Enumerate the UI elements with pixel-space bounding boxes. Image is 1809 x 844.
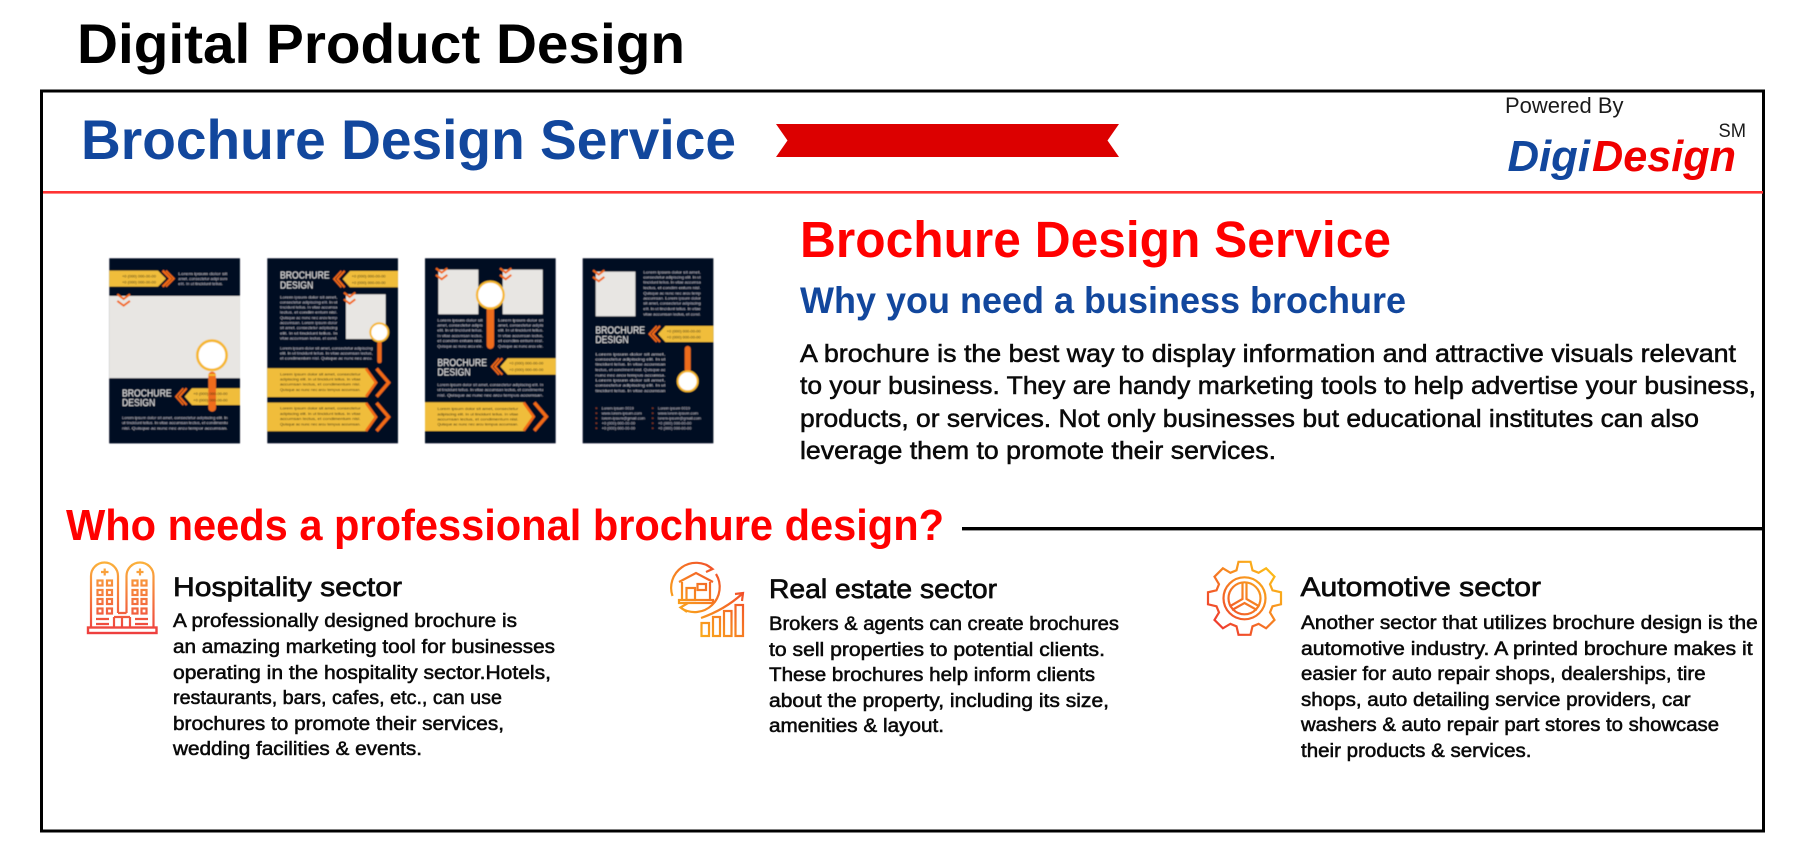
text block: intro paragraph: leverage them to promote their services. (800, 437, 1276, 465)
text block: hospitality description: operating in the hospitality sector.Hotels, (173, 662, 551, 684)
brochure 3: nisl. Quisque ac nunc nec arcu tempus accumsan. (437, 393, 543, 397)
heading: real estate sector: Real estate sector (769, 574, 997, 604)
brochure 3: accumsan lectus, et condimentum nisl. (437, 417, 518, 421)
brochure 4: » (595, 411, 597, 415)
brochure 3: +0 (000) 000-00-00 (509, 362, 543, 366)
brochure 2: accumsan lectus, et condimentum nisl. (280, 417, 361, 421)
brochure 4: Lorem ipsum dolor sit amet, (643, 270, 701, 274)
text block: automotive description: washers & auto repair part stores to showcase (1300, 714, 1719, 736)
brochure 2: sit amet, consectetur adipiscing (280, 326, 337, 330)
brochure 4: Lorem ipsum 0019 (658, 406, 690, 410)
text block: intro paragraph: products, or services. Not only businesses but educational institutes can also (800, 405, 1699, 433)
brochure 2: elit. In ut tincidunt tellus. In (280, 331, 337, 335)
brochure 4: lectus, et condiment nisl. Quisque ac (595, 368, 666, 372)
brochure 1: +0 (000) 000-00-00 (122, 281, 156, 285)
brochure 4: » (652, 411, 654, 415)
text block: hospitality description: an amazing marketing tool for businesses (173, 636, 555, 658)
brochure 4: accumsan. Lorem ipsum dolor (643, 296, 702, 300)
brochure 1: elit. In ut tincidunt tellus. (178, 282, 223, 286)
logo: powered by: Powered By (1505, 93, 1624, 118)
brochure 4: DESIGN (595, 335, 629, 346)
brochure 4: vitae accumsan lectus, et cond. (643, 312, 701, 316)
brochure 1: +0 (000) 000-00-00 (193, 392, 228, 396)
brochure 4: » (595, 426, 597, 430)
brochure 3: Quisque ac nunc nec arcu tempus accumsan. (437, 423, 518, 427)
panel: hospitality sector (88, 562, 555, 760)
header: service title: Brochure Design Service (81, 108, 736, 171)
brochure 2: elit. In ut tincidunt tellus. In vitae accumsan lectus, (280, 352, 373, 356)
brochure 4: » (652, 426, 654, 430)
brochure 2: Quisque ac nunc nec arcu temp (280, 316, 337, 320)
brochure 2: adipiscing elit. In ut tincidunt tellus. In vitae (280, 378, 361, 382)
header: red ribbon (776, 124, 1119, 157)
brochure 3: In vitae accumsan lectus, (498, 334, 543, 338)
brochure 2: consectetur adipiscing elit. In ut (280, 300, 337, 304)
brochure 3: amet, consectetur adipis (437, 324, 483, 328)
section rule (962, 527, 1764, 530)
brochure 3: DESIGN (437, 368, 471, 379)
brochure 4: +0 (000) 000-00-00 (602, 426, 635, 430)
text block: automotive description (1300, 612, 1758, 762)
brochure 4: consectetur adipiscing elit. In ut (595, 358, 665, 362)
heading: brochure design service: Brochure Design Service (800, 211, 1391, 268)
text block: automotive description: automotive industry. A printed brochure makes it (1301, 638, 1753, 660)
brochure 4: elit. In ut tincidunt tellus. In vitae (643, 307, 701, 311)
brochure 3: BROCHURE (437, 358, 487, 369)
brochure 4: sit amet, consectetur adipiscing (643, 302, 701, 306)
brochure 1: ut tincidunt tellus. In vitae accumsan lectus, et condimentu (122, 421, 228, 425)
brochure 3: Quisque ac nunc arcu ele. (498, 344, 543, 348)
brochure 1: nisl. Quisque ac nunc nec arcu tempor accumsan. (122, 426, 228, 430)
logo: wordmark (1508, 132, 1736, 181)
brochure 2: vitae accumsan lectus, et cond. (280, 336, 337, 340)
heading: automotive sector: Automotive sector (1300, 572, 1541, 602)
text block: real estate description: Brokers & agents can create brochures (769, 613, 1119, 635)
brochure 4: Lorem ipsum 0019 (602, 406, 634, 410)
brochure 2: Lorem ipsum dolor sit amet, consectetur adipiscing (280, 346, 373, 350)
brochure 4: +0 (000) 000-00-00 (658, 426, 691, 430)
text block: hospitality description: wedding facilities & events. (172, 738, 422, 760)
brochure 3: elit. In ut tincidunt tellus. (498, 329, 543, 333)
brochure 4: Lorem ipsum dolor sit amet, (595, 378, 665, 382)
brochure 3: +0 (000) 000-00-00 (509, 368, 543, 372)
brochure 1 (109, 258, 240, 443)
brochure 4: consectetur adipiscing elit. In ut (595, 384, 665, 388)
title: Digital Product Design (77, 12, 685, 75)
brochure 1: amet, consectetur adipi sum (178, 277, 227, 281)
brochure 4: www.lorem-ipsum.com (658, 411, 698, 415)
brochure 4: » (652, 406, 654, 410)
brochure 3: Quisque ac nunc arcu ele. (437, 344, 483, 348)
text block: intro paragraph (800, 340, 1756, 465)
text block: hospitality description: A professionally designed brochure is (173, 610, 517, 632)
brochure 2: +0 (000) 000-00-00 (352, 281, 386, 285)
brochure 4: BROCHURE (595, 325, 646, 336)
brochure 1: +0 (000) 000-00-00 (122, 274, 156, 278)
brochure 4: lorem-ipsum@gmail.com (658, 416, 701, 420)
text block: real estate description: amenities & layout. (769, 715, 944, 737)
logo: powered by DigiDesign (1505, 93, 1746, 181)
text block: real estate description: about the property, including its size, (769, 690, 1109, 712)
brochure 2: accumsan. Lorem ipsum dolor (280, 321, 338, 325)
brochure 2: BROCHURE (280, 270, 330, 281)
text block: automotive description: shops, auto detailing service providers, car (1301, 689, 1691, 711)
header divider (43, 191, 1763, 194)
brochure 2: +0 (000) 000-00-00 (352, 274, 386, 278)
subheading: why you need a business brochure: Why you need a business brochure (800, 280, 1406, 321)
brochure 2: lectus, et condim entum nisl. (280, 311, 337, 315)
brochure 3: elit. In ut tincidunt tellus. (437, 329, 483, 333)
brochure 2: Lorem ipsum dolor sit amet, (280, 295, 337, 299)
brochure 4: +0 (000) 000-00-00 (602, 421, 635, 425)
brochure 2 (267, 258, 398, 443)
brochure 4: tincidunt tellus. In vitae accumsan (595, 363, 665, 367)
icon: house and growth chart (671, 563, 743, 636)
brochure 2: Lorem ipsum dolor sit amet, consectetur (280, 372, 362, 376)
brochure 3 (425, 258, 556, 443)
brochure 2: Quisque ac nunc nec arcu tempus accumsan. (280, 422, 361, 426)
brochure 2: tincidunt tellus. In vitae accumsa (280, 306, 337, 310)
text block: real estate description (769, 613, 1119, 737)
panel: real estate sector (671, 563, 1119, 737)
text block: automotive description: Another sector that utilizes brochure design is the (1301, 612, 1758, 634)
brochure 1: Lorem ipsum dolor sit (178, 272, 227, 276)
logo: service mark: SM (1718, 120, 1746, 142)
brochure 4: +0 (000) 000-00-00 (667, 330, 701, 334)
brochure 3: Lorem ipsum dolor sit amet, consectetur adipiscing elit. In (437, 383, 543, 387)
brochure 4: tincidunt tellus. In vitae accumsa (643, 281, 701, 285)
brochure 2: Quisque ac nunc nec arcu tempus accumsan. (280, 388, 361, 392)
brochure 1: +0 (000) 000-00-00 (193, 399, 228, 403)
brochure 3: Lorem ipsum dolor sit (498, 318, 543, 322)
brochure 3: adipiscing elit. In ut tincidunt tellus. In vitae (437, 412, 518, 416)
text block: hospitality description: brochures to promote their services, (173, 713, 504, 735)
brochure 3: Lorem ipsum dolor sit amet, consectetur (437, 407, 519, 411)
panel: automotive sector (1208, 562, 1758, 762)
text block: hospitality description (172, 610, 555, 760)
text block: automotive description: their products & services. (1301, 740, 1532, 762)
brochure 4: » (652, 416, 654, 420)
brochure 4: » (595, 416, 597, 420)
heading: hospitality sector: Hospitality sector (173, 572, 402, 602)
brochure mockups (109, 258, 713, 443)
logo: wordmark: Design (1592, 132, 1736, 181)
brochure 2: Lorem ipsum dolor sit amet, consectetur (280, 407, 362, 411)
text block: intro paragraph: to your business. They are handy marketing tools to help advertise your business, (800, 372, 1756, 400)
heading: who needs a professional brochure design: Who needs a professional brochure design? (66, 501, 944, 550)
brochure 4: Lorem ipsum dolor sit amet, (595, 352, 665, 356)
text block: real estate description: These brochures help inform clients (769, 664, 1095, 686)
brochure 2: adipiscing elit. In ut tincidunt tellus. In vitae (280, 412, 361, 416)
brochure 3: et condim entum nisl. (437, 339, 483, 343)
brochure 4: +0 (000) 000-00-00 (667, 336, 701, 340)
brochure 4: » (595, 406, 597, 410)
brochure 4: » (595, 421, 597, 425)
brochure 2: DESIGN (280, 280, 313, 291)
brochure 4: lorem-ipsum@gmail.com (602, 416, 645, 420)
icon: hotel buildings (88, 562, 156, 633)
brochure 4: » (652, 421, 654, 425)
brochure 4: Quisque ac nunc nec arcu temp (643, 291, 701, 295)
text block: automotive description: easier for auto repair shops, dealerships, tire (1301, 663, 1706, 685)
brochure 4: +0 (000) 000-00-00 (658, 421, 691, 425)
brochure 4: consectetur adipiscing elit. In ut (643, 276, 701, 280)
brochure 1: BROCHURE (122, 389, 172, 400)
logo: wordmark: Digi (1508, 132, 1591, 181)
text block: hospitality description: restaurants, bars, cafes, etc., can use (173, 687, 502, 709)
brochure 3: et condim entum nisl. (498, 339, 543, 343)
brochure 2: accumsan lectus, et condimentum nisl. (280, 383, 361, 387)
brochure 4: tincidunt tellus. In vitae accumsan (595, 389, 665, 393)
icon: gear with wheel (1208, 562, 1281, 635)
brochure 4: www.lorem-ipsum.com (602, 411, 642, 415)
brochure 4: nunc nec arcu tempus accumsa. (595, 373, 665, 377)
brochure 3: amet, consectetur adipis (498, 324, 544, 328)
brochure 4 (583, 258, 713, 443)
brochure 3: In vitae accumsan lectus, (437, 334, 483, 338)
brochure 3: Lorem ipsum dolor sit (437, 318, 483, 322)
text block: intro paragraph: A brochure is the best way to display information and attractive visuals relevant (800, 340, 1736, 368)
brochure 2: et condimentum nisl. Quisque ac nunc nec arcu. (280, 357, 373, 361)
brochure 1: Lorem ipsum dolor sit amet, consectetur adipiscing elit. In (122, 416, 228, 420)
text block: real estate description: to sell properties to potential clients. (769, 639, 1105, 661)
brochure 1: DESIGN (122, 398, 155, 409)
brochure 3: ut tincidunt tellus. In vitae accumsan lectus, et condimentu (437, 388, 543, 392)
brochure 4: lectus, et condim entum nisl. (643, 286, 701, 290)
